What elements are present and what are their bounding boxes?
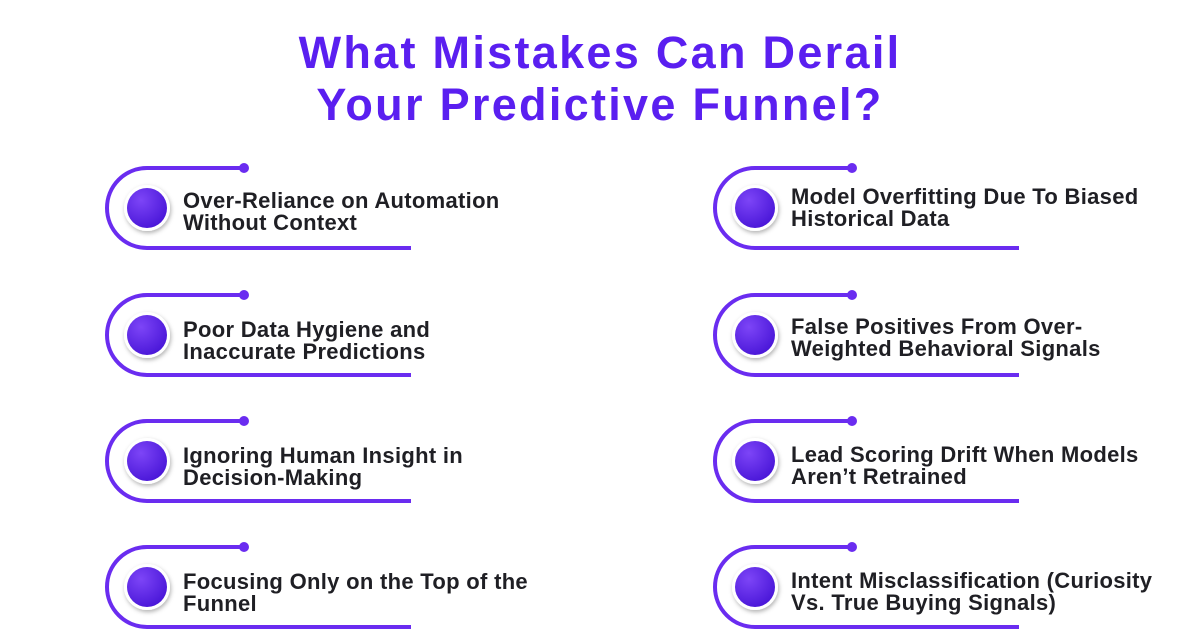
item: focusing only on top: Focusing Only on the Top of the bbox=[183, 569, 528, 594]
item: intent misclassification: Vs. True Buying Signals) bbox=[791, 590, 1056, 615]
title: Your Predictive Funnel? bbox=[316, 79, 884, 130]
item: poor data hygiene: Poor Data Hygiene and bbox=[183, 317, 430, 342]
item: over-reliance: Without Context bbox=[183, 210, 358, 235]
title bbox=[299, 27, 901, 130]
item: focusing only on top bbox=[107, 542, 528, 627]
item: model overfitting: Historical Data bbox=[791, 206, 950, 231]
item: poor data hygiene bbox=[107, 290, 430, 375]
item: lead scoring drift: Aren’t Retrained bbox=[791, 464, 967, 489]
item: model overfitting: Model Overfitting Due To Biased bbox=[791, 184, 1138, 209]
title: What Mistakes Can Derail bbox=[299, 27, 901, 78]
item: model overfitting bbox=[715, 163, 1138, 248]
item: over-reliance: Over-Reliance on Automation bbox=[183, 188, 500, 213]
item: ignoring human insight bbox=[107, 416, 463, 501]
item: poor data hygiene: Inaccurate Predictions bbox=[183, 339, 426, 364]
item: intent misclassification: Intent Misclassification (Curiosity bbox=[791, 568, 1153, 593]
item: over-reliance bbox=[107, 163, 500, 248]
item: false positives: False Positives From Over- bbox=[791, 314, 1082, 339]
item: focusing only on top: Funnel bbox=[183, 591, 257, 616]
item: ignoring human insight: Ignoring Human Insight in bbox=[183, 443, 463, 468]
item: intent misclassification bbox=[715, 542, 1153, 627]
item: false positives bbox=[715, 290, 1101, 375]
item: ignoring human insight: Decision-Making bbox=[183, 465, 362, 490]
item: false positives: Weighted Behavioral Signals bbox=[791, 336, 1101, 361]
item: lead scoring drift bbox=[715, 416, 1139, 501]
item: lead scoring drift: Lead Scoring Drift When Models bbox=[791, 442, 1139, 467]
